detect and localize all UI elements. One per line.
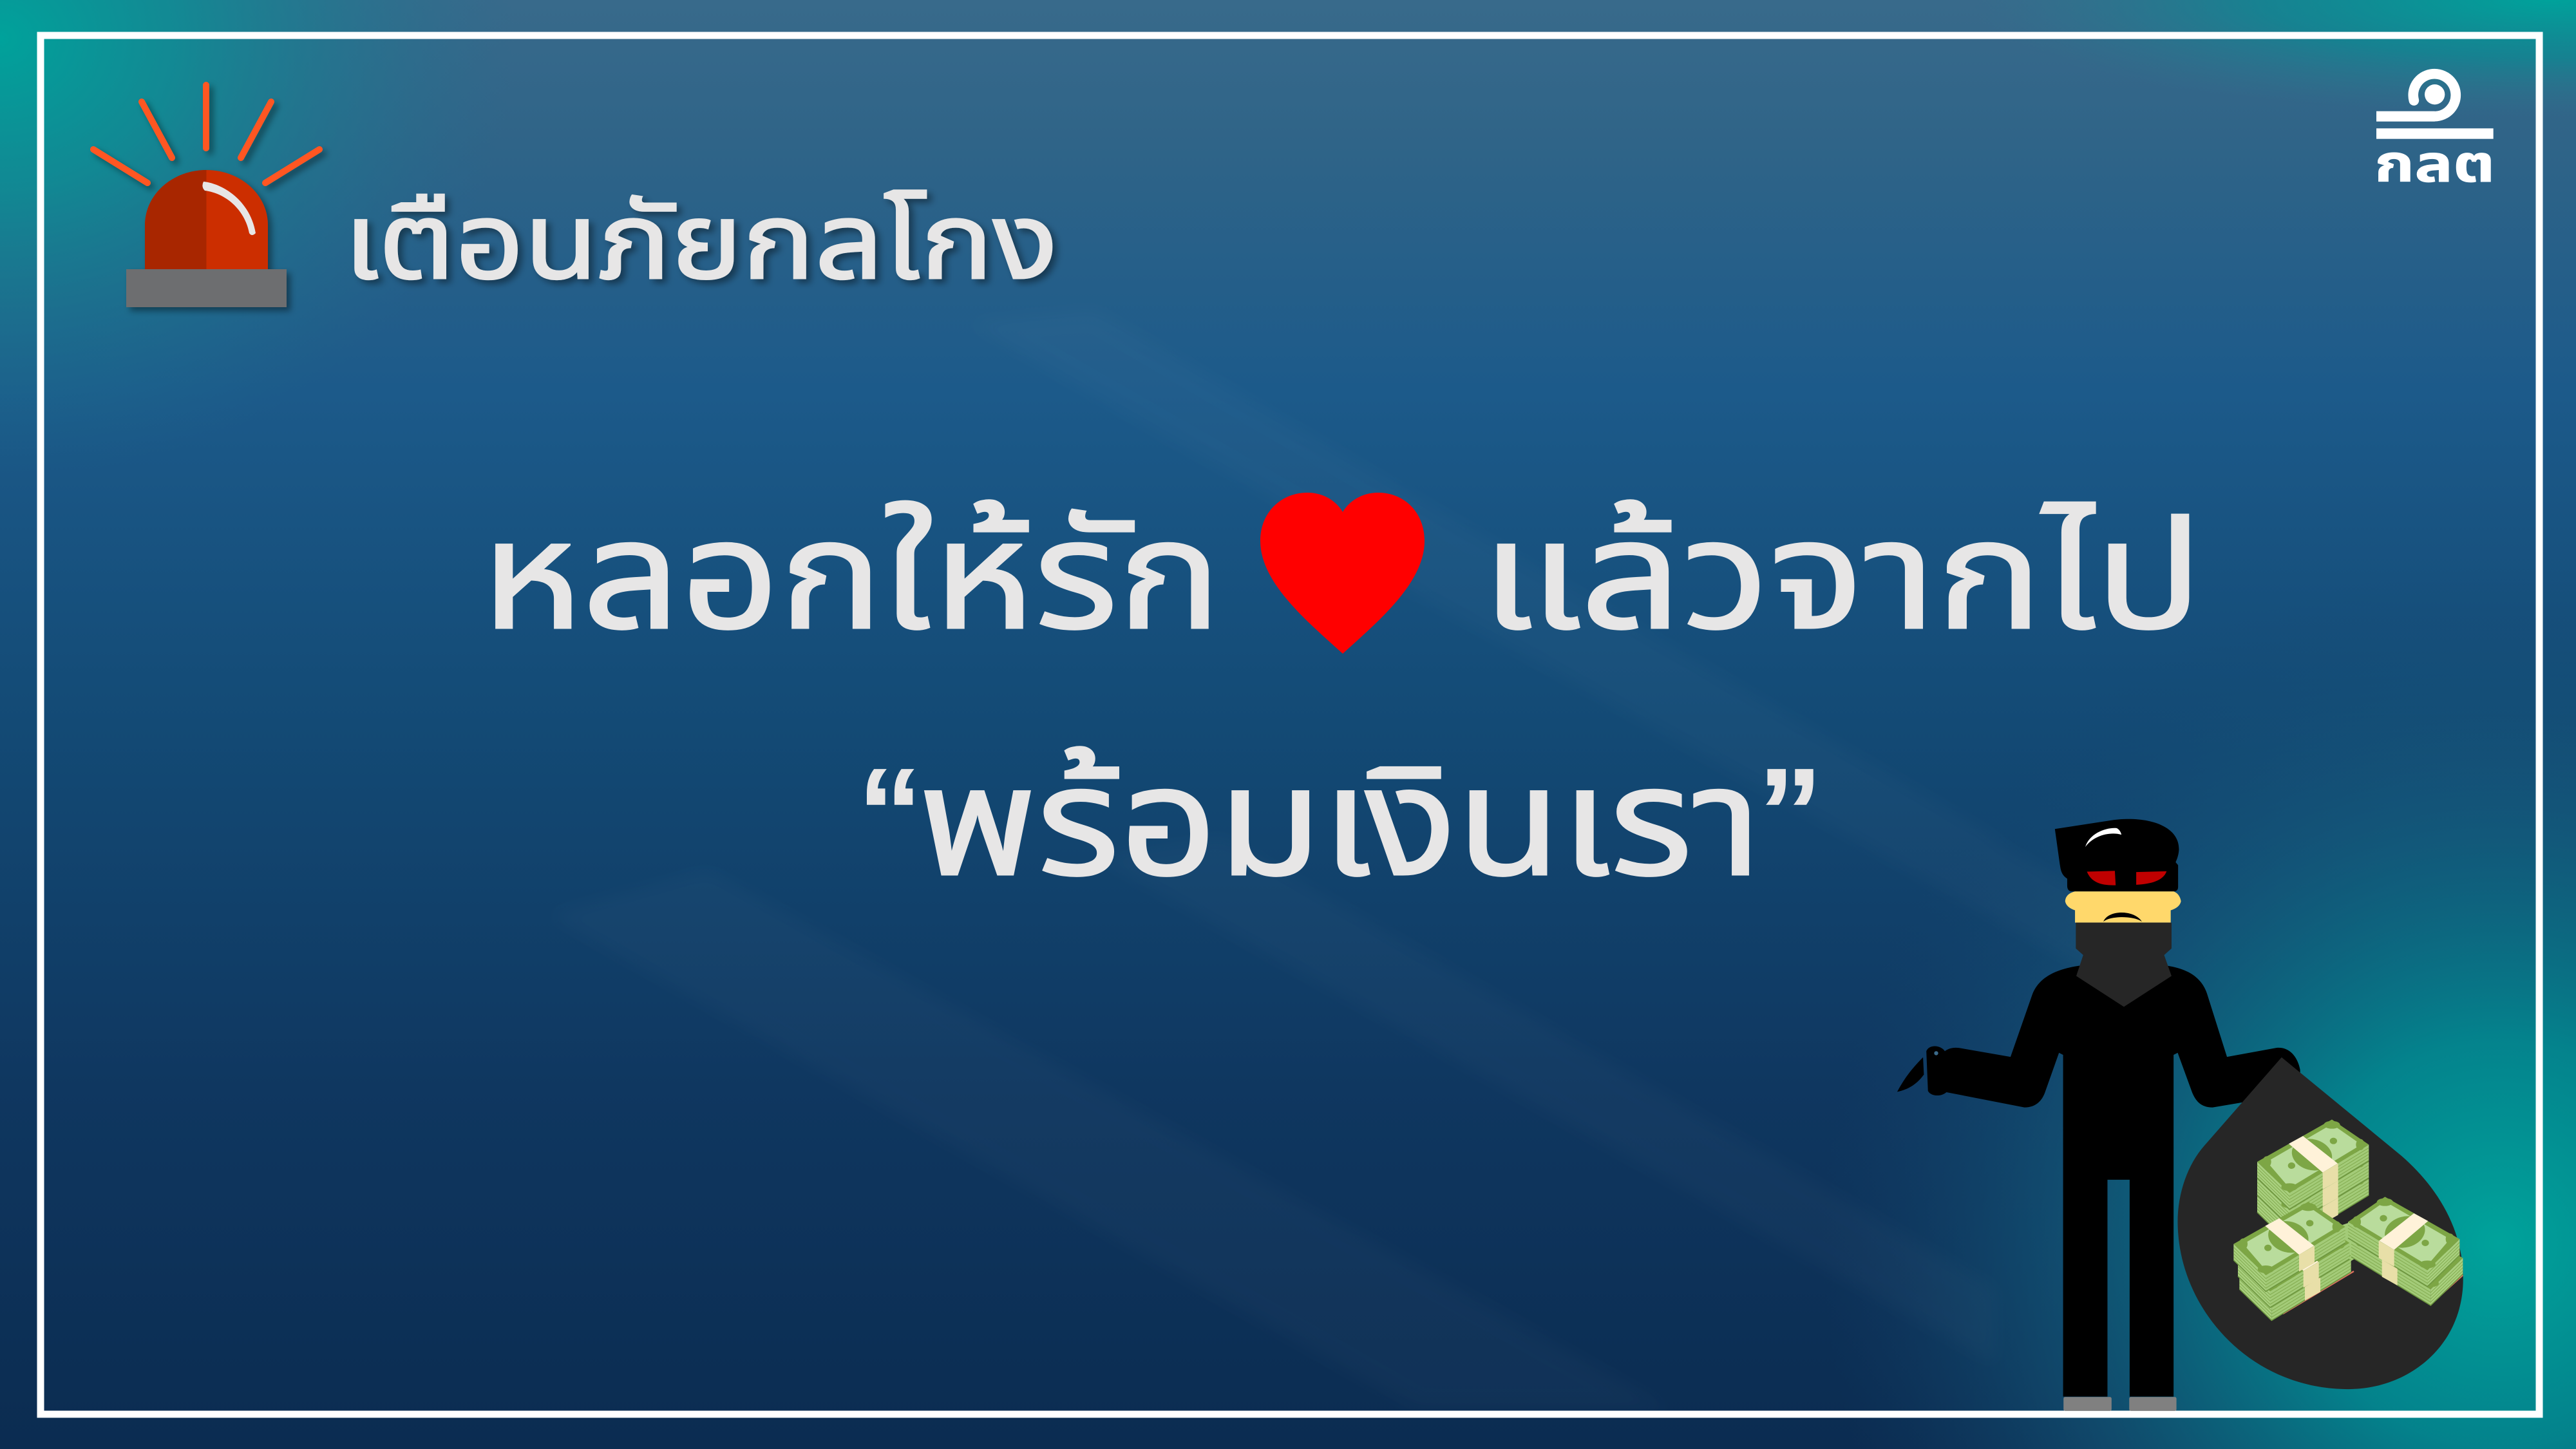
money: right stack — [2348, 1197, 2463, 1305]
money: junction filler — [2340, 1222, 2356, 1267]
money: back stack — [2257, 1119, 2369, 1244]
thief eyes — [2087, 871, 2166, 886]
money bag — [2178, 1057, 2463, 1389]
money stacks — [2233, 1119, 2463, 1320]
hat shine — [2085, 828, 2121, 847]
thief face — [2065, 891, 2181, 923]
money: left stack — [2233, 1202, 2354, 1320]
icon: siren rays — [93, 85, 319, 183]
heading: เตือนภัยกลโกง — [344, 182, 1058, 301]
icon: siren dome and base — [126, 170, 287, 307]
icon: siren — [93, 85, 319, 307]
headline line 1 right: แล้วจากไป — [1481, 491, 2202, 661]
icon: SEC logo — [2374, 74, 2495, 193]
thief mask — [2076, 923, 2172, 1007]
thief body — [1926, 966, 2300, 1397]
thief shoes — [2063, 1397, 2177, 1411]
logo wordmark: กลต — [2374, 135, 2495, 193]
thief illustration — [1897, 819, 2463, 1411]
thief hat — [2055, 819, 2179, 891]
thief mouth — [2103, 913, 2142, 922]
thief knife — [1897, 1057, 1924, 1092]
icon: heart — [1260, 493, 1425, 654]
headline line 2: “พร้อมเงินเรา” — [862, 737, 1819, 907]
headline line 1 left: หลอกให้รัก — [481, 491, 1222, 661]
